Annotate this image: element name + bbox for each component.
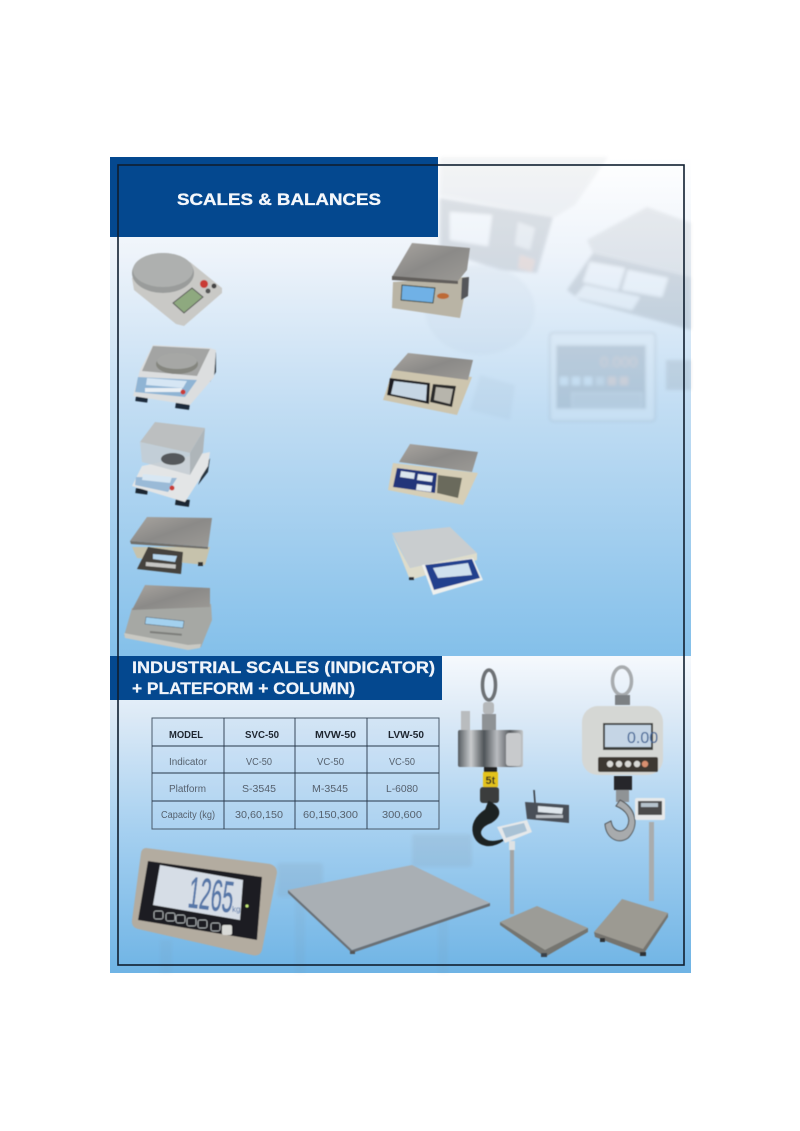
table row: capacity: 300,600 <box>382 810 422 821</box>
table row: indicator: VC-50 <box>317 757 344 768</box>
table row: capacity: 30,60,150 <box>235 810 283 821</box>
table row: indicator: VC-50 <box>246 757 272 768</box>
table header row: MVW-50 <box>315 730 356 741</box>
product: white digital crane scale: 0.00 <box>627 730 658 747</box>
table row: capacity: Capacity (kg) <box>161 810 215 821</box>
heading: scales and balances: SCALES & BALANCES <box>177 190 381 209</box>
table header row: LVW-50 <box>388 730 424 741</box>
product: large digital indicator: 1265 <box>186 868 236 922</box>
table row: indicator: Indicator <box>169 757 208 768</box>
product: stainless crane scale: 5t <box>486 775 496 787</box>
product: white digital crane scale <box>582 667 663 841</box>
heading: industrial scales line one: INDUSTRIAL SCALES (INDICATOR) <box>132 658 435 677</box>
heading: industrial scales line two: + PLATEFORM + COLUMN) <box>132 679 355 698</box>
table: model specifications <box>152 718 439 829</box>
panel: scales and balances background <box>110 157 691 655</box>
table header row <box>169 730 424 741</box>
product: price computing scale <box>383 353 473 415</box>
watermark: faded scales in top right <box>425 157 691 421</box>
table row: capacity <box>161 810 422 821</box>
table row: platform: Platform <box>169 784 206 795</box>
header band: industrial scales <box>110 656 442 700</box>
product: column platform scale two <box>594 798 668 956</box>
table row: platform: S-3545 <box>242 784 276 795</box>
table header row: SVC-50 <box>245 730 279 741</box>
product: round pan digital scale <box>132 253 222 326</box>
table header row: MODEL <box>169 730 203 741</box>
watermark: faded scales in top right: 0.000 <box>600 354 638 371</box>
watermark: faded indicators in lower section <box>160 834 472 973</box>
table row: indicator: VC-50 <box>389 757 415 768</box>
product: flat stainless counter scale <box>124 585 212 650</box>
table row: platform <box>169 784 418 795</box>
product: stainless crane scale <box>458 670 523 845</box>
product: washdown table scale <box>392 243 470 318</box>
product: precision balance <box>133 345 216 410</box>
table row: platform: M-3545 <box>312 784 348 795</box>
product: floor platform <box>288 865 490 954</box>
product: wireless remote indicator <box>525 790 569 823</box>
section separator strip <box>110 650 691 656</box>
header band: scales and balances <box>110 157 438 237</box>
table row: capacity: 60,150,300 <box>303 810 358 821</box>
product: column platform scale one <box>497 820 588 957</box>
product: balance with glass draft shield <box>132 422 210 507</box>
product: bench scale with dark indicator <box>130 517 212 574</box>
product: large digital indicator <box>132 848 277 955</box>
table row: platform: L-6080 <box>386 784 418 795</box>
frame outline <box>118 165 684 965</box>
product: large digital indicator: kg <box>232 905 240 914</box>
panel: industrial scales background <box>110 656 691 973</box>
product: white platform scale with blue indicator <box>392 527 483 595</box>
product: counting scale with blue panel <box>388 444 478 505</box>
table row: indicator <box>169 757 415 768</box>
